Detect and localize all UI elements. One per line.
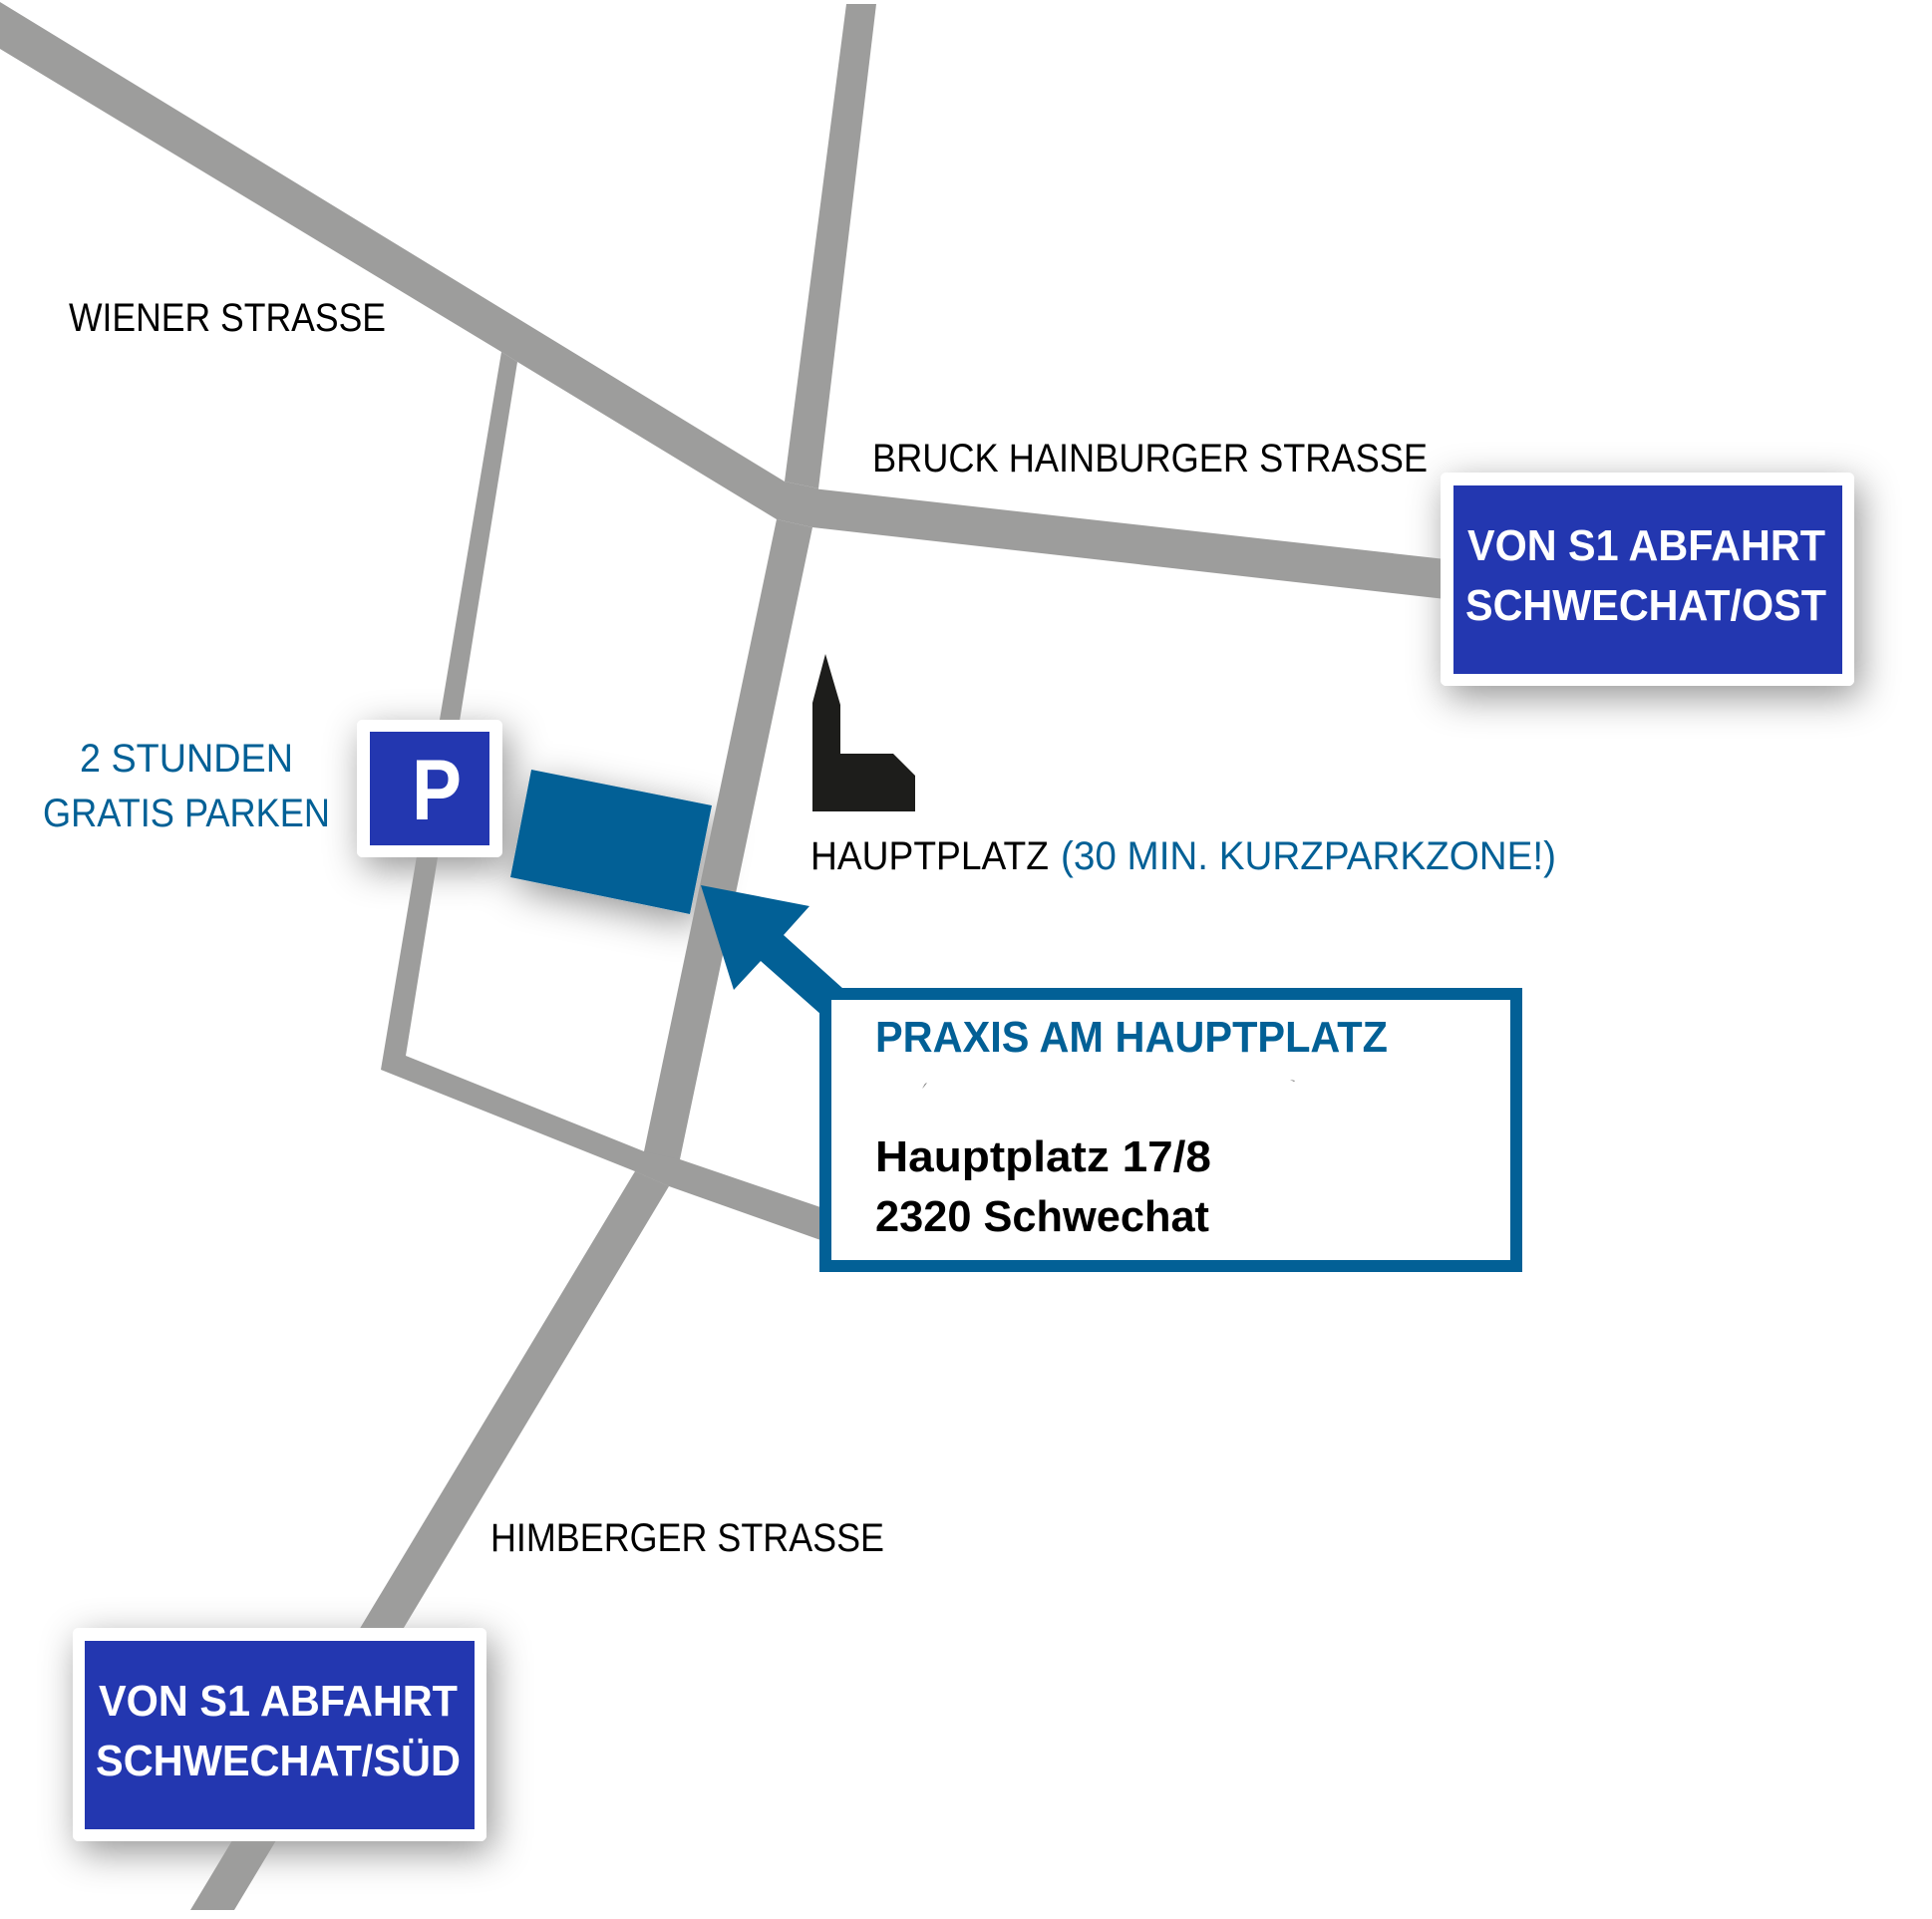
callout: practice address: 2320 Schwechat [875,1192,1209,1241]
arrow: points to practice [701,885,843,1015]
sign: parking P [357,720,501,857]
callout: practice address: Hauptplatz 17/8 [875,1132,1211,1181]
label: parking note: GRATIS PARKEN [43,792,330,835]
sign: S1 exit east [1441,473,1854,686]
sign: S1 exit east: VON S1 ABFAHRT [1467,521,1825,570]
road: Bruck Hainburger Strasse [812,488,1446,599]
road: main street through Hauptplatz [635,519,812,1186]
road: Himberger Strasse [190,1171,669,1910]
sign: S1 exit south: SCHWECHAT/SÜD [96,1737,461,1785]
sign: S1 exit east: SCHWECHAT/OST [1465,581,1826,630]
label: Hauptplatz [810,834,1556,878]
callout: practice address: PRAXIS AM HAUPTPLATZ [875,1013,1388,1062]
icon: church [812,654,915,811]
label: Hauptplatz: (30 MIN. KURZPARKZONE!) [1061,834,1556,878]
label: parking note: 2 STUNDEN [80,737,293,781]
road network [0,2,1446,1910]
road: north street [785,4,876,488]
sign: parking P: P [412,743,462,838]
road: Wiener Strasse [0,2,818,527]
label: Wiener Strasse: WIENER STRASSE [69,296,386,340]
callout: practice address [825,994,1516,1266]
label: Himberger Strasse: HIMBERGER STRASSE [490,1516,884,1560]
label: Hauptplatz: HAUPTPLATZ [810,834,1049,878]
sign: S1 exit south [73,1628,486,1841]
road: parking loop [381,352,823,1241]
building: practice location [510,770,712,914]
label: Bruck Hainburger Strasse: BRUCK HAINBURGER STRASSE [872,437,1428,480]
sign: S1 exit south: VON S1 ABFAHRT [99,1677,458,1726]
label: parking note [43,737,330,835]
